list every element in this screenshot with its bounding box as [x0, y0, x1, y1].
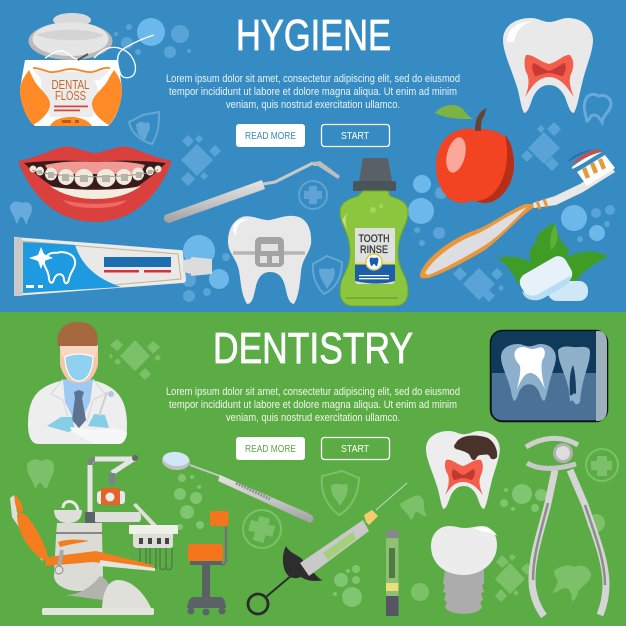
icon: cartridge [386, 530, 398, 616]
text block: hygiene description: veniam, quis nostrud exercitation ullamco. [226, 99, 400, 111]
title: hygiene: HYGIENE [236, 11, 391, 60]
icon: toothpaste tube [14, 237, 212, 296]
floss thread [94, 35, 154, 78]
icon: dental unit chair [10, 455, 178, 615]
backrest [10, 495, 45, 561]
icon: dental probe [164, 161, 340, 223]
button: start [322, 438, 390, 460]
icon: plus circles [299, 181, 327, 209]
icon: x-ray [490, 330, 608, 422]
text block: hygiene description [166, 73, 460, 111]
text block: dentistry description: veniam, quis nostrud exercitation ullamco. [226, 412, 400, 424]
icon: dental implant [431, 526, 497, 614]
panel: hygiene [0, 0, 626, 312]
icon: dental floss [20, 13, 154, 126]
icon: faint teeth [27, 459, 591, 601]
text block: hygiene description: Lorem ipsum dolor sit amet, consectetur adipiscing elit, sed do eiusmod [166, 73, 460, 85]
button: read more: READ MORE [245, 130, 296, 142]
icon: faint teeth [10, 94, 611, 224]
icon: plus circle [243, 510, 281, 548]
decoration: bubbles and diamonds [10, 18, 615, 302]
button: start [322, 124, 390, 146]
text block: dentistry description [166, 386, 460, 424]
icon: tooth cross-section [503, 18, 593, 113]
text block: hygiene description: tempor incididunt ut labore et dolore magna aliqua. Ut enim ad minim [169, 86, 457, 98]
icon: mouth rinse bottle: RINSE [360, 244, 388, 256]
title: dentistry: DENTISTRY [213, 324, 413, 373]
icon: red apple [435, 105, 514, 203]
icon: dentist stool [187, 511, 228, 616]
icon: plus circle right [586, 449, 618, 481]
icon: mouth rinse bottle: TOOTH [358, 233, 390, 245]
icon: dental forceps [526, 438, 606, 616]
icon: pills [411, 514, 605, 601]
button: read more [236, 124, 305, 147]
icon: dental floss: DENTAL [52, 78, 90, 92]
button: read more [236, 437, 305, 460]
button: start: START [341, 443, 369, 455]
icon: shield tooth [322, 471, 359, 515]
button: read more: READ MORE [245, 443, 296, 455]
icon: shield tooth [129, 112, 159, 144]
icon: chewing gum and mint [498, 223, 608, 303]
icon: dental mirror [161, 451, 313, 523]
icon: dental syringe [248, 483, 407, 614]
icon: shield tooth 2 [313, 256, 342, 294]
orange seat [45, 551, 153, 569]
icon: decayed tooth [426, 431, 500, 509]
icon: smile with braces [18, 147, 172, 222]
text block: dentistry description: Lorem ipsum dolor sit amet, consectetur adipiscing elit, sed do eiusmod [166, 386, 460, 398]
spittoon [54, 501, 82, 523]
button: start: START [341, 130, 369, 142]
chair base [54, 523, 103, 591]
lamp arm [90, 455, 138, 525]
text block: dentistry description: tempor incididunt ut labore et dolore magna aliqua. Ut enim ad minim [169, 399, 457, 411]
icon: mouth rinse bottle [340, 158, 408, 306]
panel: dentistry [0, 312, 626, 626]
icon: dental floss: FLOSS [55, 89, 86, 103]
decoration: bubbles and diamonds [27, 339, 618, 607]
icon: dentist [28, 322, 127, 444]
icon: toothbrush [420, 149, 615, 278]
icon: tooth with bracket [228, 216, 311, 304]
control tray [129, 525, 178, 570]
